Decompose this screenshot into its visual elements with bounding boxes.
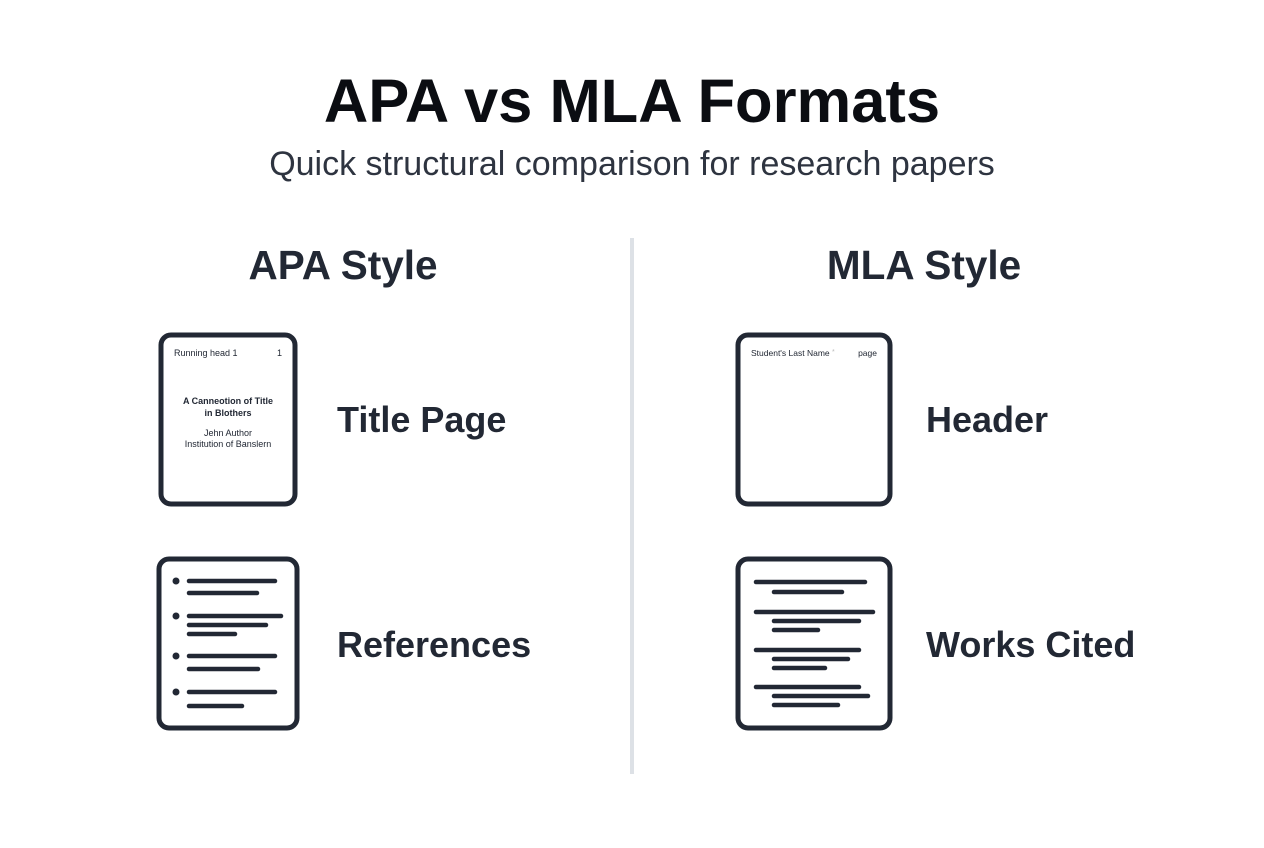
icon: APA title page document: in Blothers — [204, 408, 252, 418]
label: References: References — [337, 624, 531, 665]
icon: MLA works cited document — [738, 559, 890, 728]
icon: APA references document — [159, 559, 297, 728]
panel: MLA — [738, 242, 1135, 728]
heading: APA Style: APA Style — [248, 242, 438, 288]
icon: APA title page document: Running head 1 — [174, 348, 238, 358]
icon: MLA header document — [738, 335, 890, 504]
icon: MLA header document: Student's Last Name — [751, 348, 830, 358]
icon: APA title page document — [161, 335, 295, 504]
title: APA vs MLA Formats — [324, 67, 940, 136]
icon: MLA header document: * — [832, 349, 835, 356]
panel: APA — [159, 242, 531, 728]
label: Header: Header — [926, 399, 1048, 440]
heading: MLA Style: MLA Style — [827, 242, 1021, 288]
icon: MLA header document: page — [858, 348, 877, 358]
subtitle: Quick structural comparison for research papers — [269, 145, 995, 183]
icon: APA title page document: 1 — [277, 348, 282, 358]
icon: APA title page document: A Canneotion of Title — [183, 396, 273, 406]
icon: APA title page document: Jehn Author — [204, 428, 252, 438]
label: Title Page: Title Page — [337, 399, 506, 440]
icon: APA title page document: Institution of Banslern — [185, 439, 271, 449]
label: Works Cited: Works Cited — [926, 624, 1135, 665]
